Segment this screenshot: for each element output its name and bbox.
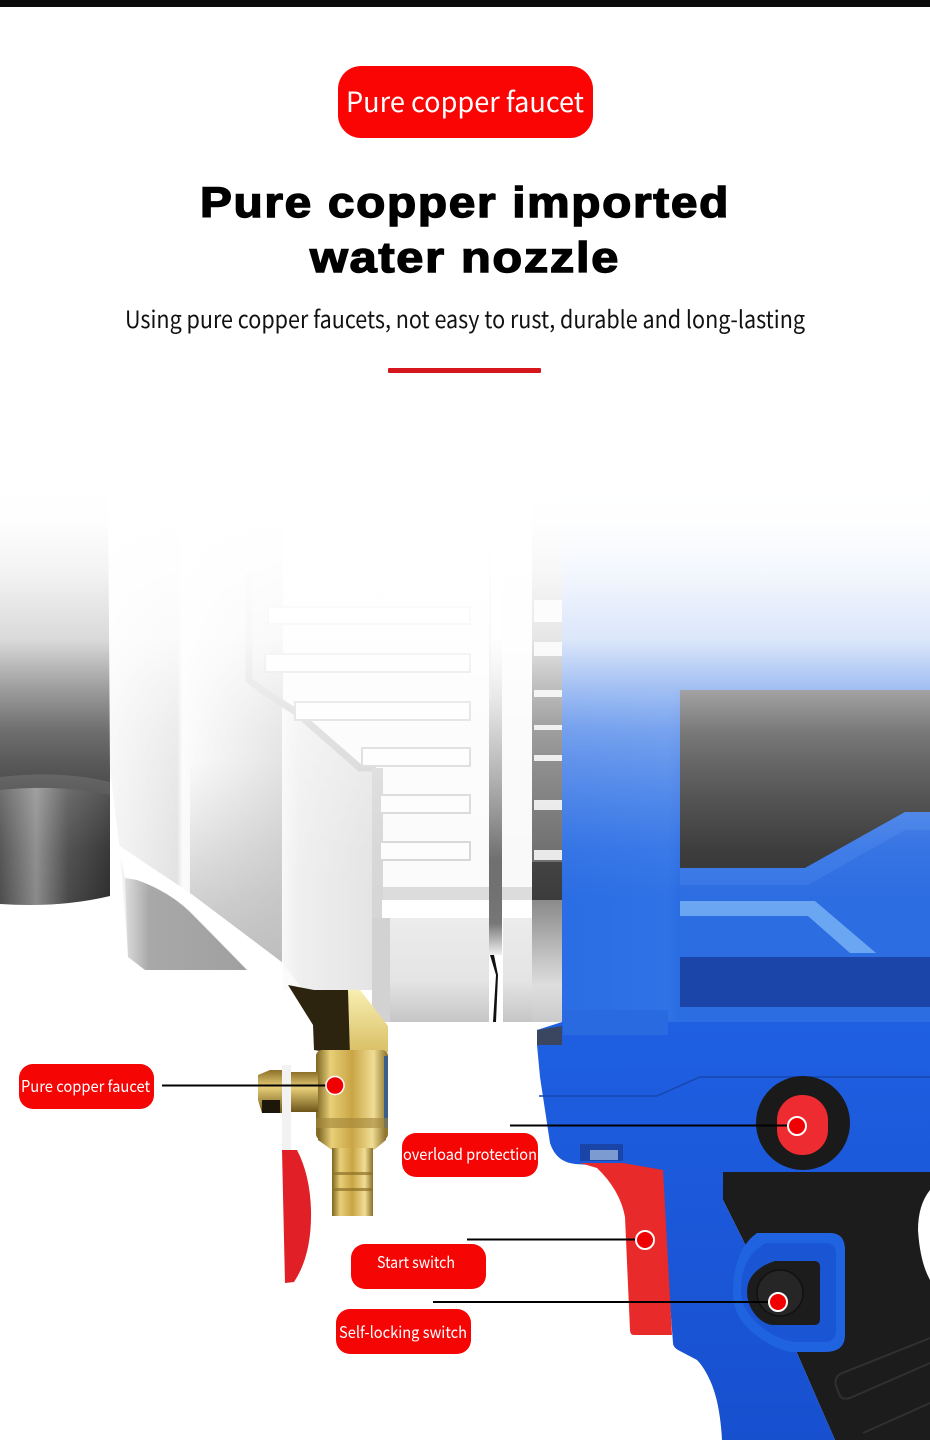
heading badge: Pure copper faucet (346, 81, 584, 121)
grip texture (836, 1338, 930, 1433)
top black bar (0, 0, 930, 7)
blue upper housing (562, 480, 930, 690)
pistol grip black (723, 1165, 930, 1440)
title: water nozzle (309, 234, 620, 282)
callout: start switch: Start switch (377, 1249, 455, 1273)
blue shoulder (680, 812, 930, 1040)
cooling fins (532, 480, 562, 1022)
callout: self-locking switch (336, 1293, 787, 1354)
overload protection button (756, 1076, 850, 1170)
gearbox seam (489, 480, 532, 1022)
title: Pure copper imported (200, 179, 730, 227)
soft white fade over upper machine (0, 480, 930, 900)
blue gear housing (537, 1010, 930, 1440)
title (200, 179, 730, 282)
faucet lever (282, 1065, 311, 1283)
pure copper faucet (258, 985, 388, 1216)
red divider (388, 368, 541, 373)
callout: pure copper faucet: Pure copper faucet (21, 1073, 150, 1097)
callout: overload protection: overload protection (403, 1141, 537, 1165)
subtitle: Using pure copper faucets, not easy to rust, durable and long-lasting (125, 300, 805, 335)
callout: pure copper faucet (19, 1064, 344, 1109)
drill bit housing on left (0, 480, 110, 905)
stepped ribs (265, 607, 470, 860)
product illustration: drill machine (0, 480, 930, 1440)
blue housing column (562, 690, 680, 1035)
white motor housing (108, 480, 532, 1022)
callout: start switch (351, 1231, 654, 1289)
start trigger (580, 1163, 672, 1335)
self-locking switch (733, 1233, 845, 1352)
lower left wedge (125, 878, 247, 970)
heading badge (338, 66, 593, 138)
callout: overload protection (402, 1117, 806, 1177)
dark window (680, 690, 930, 880)
callout: self-locking switch: Self-locking switch (339, 1319, 467, 1343)
